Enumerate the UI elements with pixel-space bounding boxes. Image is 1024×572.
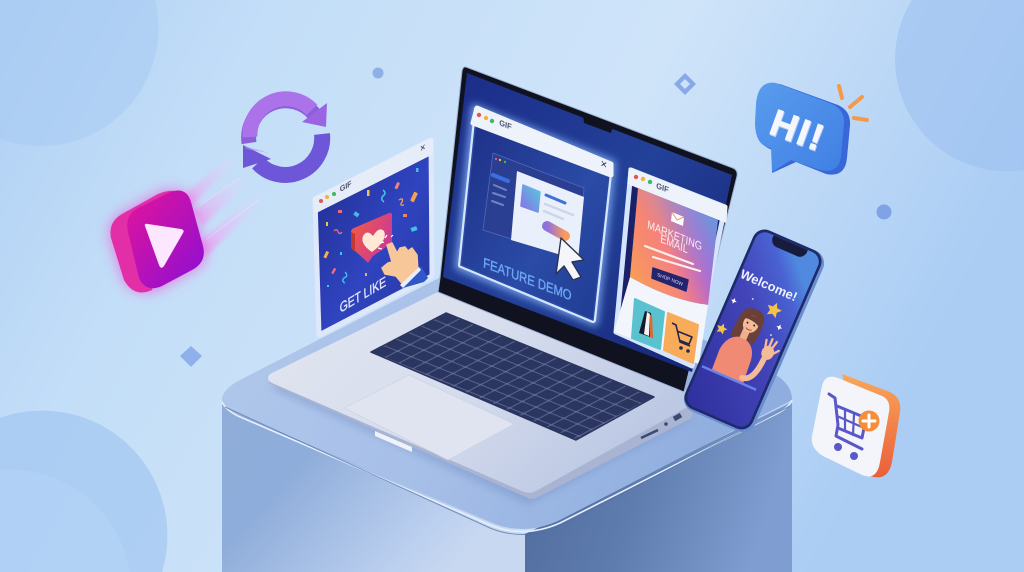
product tile: dress — [632, 299, 664, 349]
window: marketing email: GIF — [656, 181, 669, 195]
phone — [680, 226, 828, 437]
keyboard — [371, 313, 654, 440]
window: feature demo — [458, 107, 613, 323]
plus badge — [858, 410, 880, 432]
trackpad — [344, 375, 514, 460]
marketing email text: MARKETING — [647, 218, 702, 254]
laptop shadow — [270, 345, 695, 505]
like bubble — [351, 213, 392, 263]
product tile: cart — [664, 313, 698, 363]
decorative diamond left — [180, 346, 202, 367]
window: marketing email — [614, 169, 730, 366]
laptop screen — [438, 67, 737, 392]
decorative dot right — [876, 204, 892, 220]
white lower panel — [614, 277, 708, 364]
pointing hand — [378, 235, 428, 288]
display — [443, 73, 732, 372]
cart icon — [812, 374, 900, 477]
camera notch — [583, 115, 613, 133]
title bar — [315, 140, 431, 211]
bezel — [438, 67, 737, 392]
side ports — [641, 415, 681, 438]
shop now button: SHOP NOW — [657, 272, 683, 288]
decorative dot top — [372, 68, 384, 78]
spark lines — [839, 86, 867, 120]
shop now button — [652, 268, 688, 291]
play icon — [110, 190, 204, 292]
title bar — [473, 108, 611, 175]
pedestal — [222, 248, 792, 572]
speed streaks — [178, 150, 268, 256]
HI speech bubble: HI! — [765, 102, 831, 159]
welcome text: Welcome! — [738, 266, 800, 304]
get like label: GET LIKE — [339, 273, 387, 316]
stage line — [702, 365, 757, 391]
gradient hero — [630, 188, 718, 305]
phone notch — [770, 235, 808, 259]
confetti — [323, 168, 418, 287]
window: feature demo: GIF — [499, 118, 512, 132]
stars — [715, 284, 791, 355]
envelope — [671, 212, 684, 226]
feature demo label: FEATURE DEMO — [483, 254, 572, 304]
sync arrows icon — [243, 99, 327, 175]
heart — [362, 229, 385, 252]
inner app window — [483, 153, 584, 260]
HI speech bubble — [755, 83, 867, 175]
window: get like GIF: GIF — [340, 179, 352, 194]
play triangle — [145, 224, 184, 268]
window: get like GIF — [315, 140, 432, 335]
laptop base — [268, 290, 693, 499]
waving woman — [711, 302, 790, 392]
decorative diamond top — [674, 73, 696, 95]
window: feature demo: ✕ — [600, 158, 608, 171]
HI label: HI! — [765, 103, 831, 160]
cart — [829, 394, 866, 449]
window: get like GIF: ✕ — [420, 142, 426, 154]
cursor — [556, 238, 584, 280]
thumb notch — [375, 431, 412, 452]
window: marketing email: EMAIL — [660, 232, 688, 257]
